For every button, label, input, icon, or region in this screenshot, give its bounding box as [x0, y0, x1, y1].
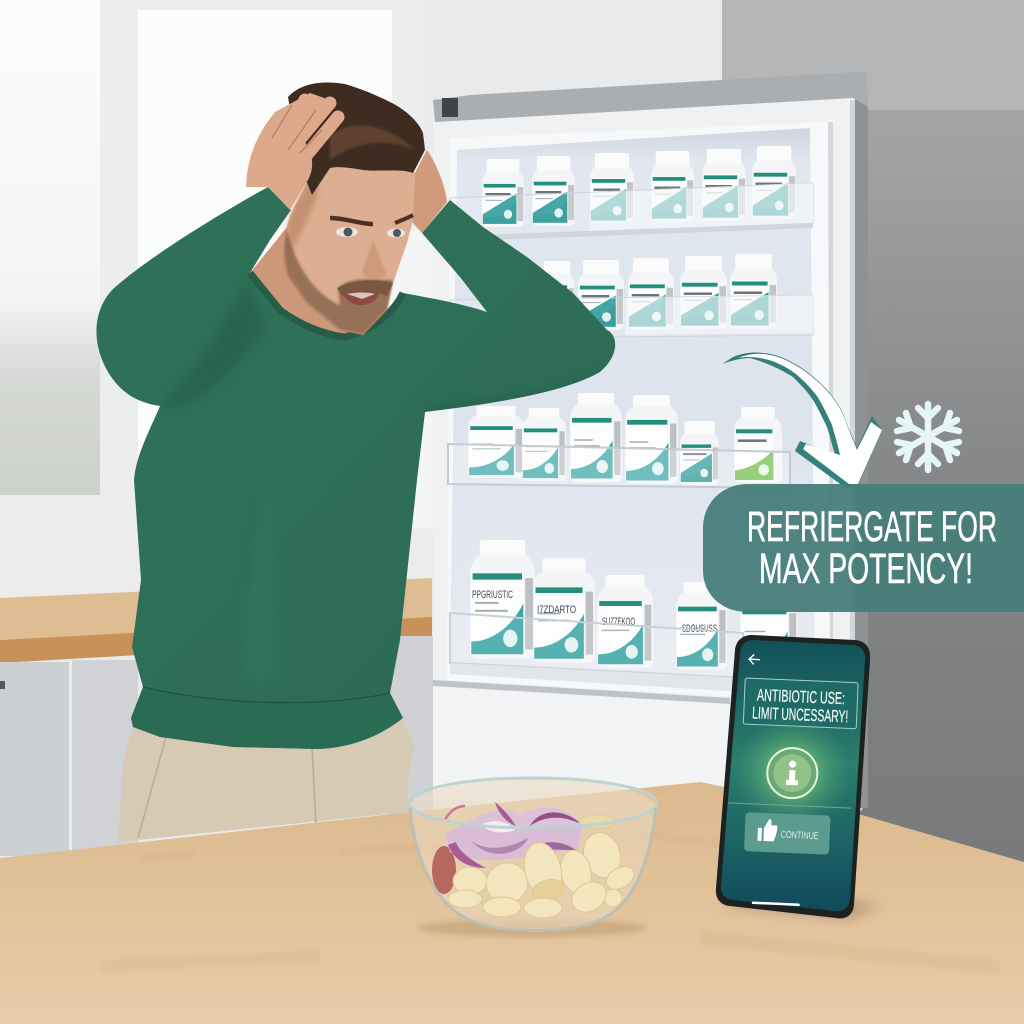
fridge top cap [433, 72, 868, 122]
countertop [0, 782, 1024, 1024]
shelf 3 bottles [468, 393, 782, 485]
shelf 3 rail [448, 444, 790, 488]
shelf 2 rail [450, 295, 813, 337]
bottle label names: PPGRIUSTIC [472, 589, 513, 601]
hem seam [143, 687, 390, 703]
back arrow [749, 654, 760, 665]
banana slices [448, 815, 638, 918]
confirm button [744, 812, 831, 855]
stubble [285, 230, 393, 335]
fridge frame stripes [828, 100, 855, 700]
bottle label names: SUZZEKOO [602, 616, 635, 628]
bowl rim [409, 778, 657, 828]
neck [250, 227, 370, 342]
nose [362, 240, 386, 279]
snowflake icon [897, 404, 959, 470]
callout banner [703, 484, 1024, 612]
confirm button: CONTINUE [780, 830, 819, 842]
shelf 1 bottles [482, 146, 796, 227]
alert box: LIMIT UNCESSARY! [752, 703, 849, 726]
phone shadow [720, 890, 880, 920]
phone body [716, 635, 870, 918]
worried man [96, 83, 615, 842]
hair highlight [330, 126, 415, 160]
window [0, 0, 434, 532]
bottle label names [472, 589, 717, 635]
face side shading [287, 168, 318, 260]
trouser seams [138, 737, 316, 838]
wooden countertop back [0, 578, 432, 663]
shelf 1 rail [450, 183, 813, 240]
red piece [432, 846, 456, 894]
fridge interior [450, 128, 815, 695]
smartphone [716, 635, 880, 920]
raised hand left [246, 93, 338, 210]
curved arrow [722, 352, 882, 489]
glass bowl with bananas and onion [409, 778, 657, 937]
fridge inner frame [447, 122, 830, 702]
ribbed collar [250, 273, 403, 337]
trousers [118, 720, 414, 842]
onion pieces [445, 802, 582, 868]
shelf 2 bottles [540, 254, 777, 330]
fridge side edge [855, 98, 868, 808]
right wall [722, 0, 1024, 880]
hair [288, 83, 425, 195]
bowl shadow [417, 919, 647, 937]
screen content [724, 654, 859, 908]
shelf 4 bottles [470, 540, 798, 673]
sweater shading [131, 280, 610, 749]
window sill [0, 528, 432, 598]
alert box [743, 678, 858, 729]
wood planks [100, 830, 1000, 975]
refrigerator [433, 72, 868, 815]
moustache and mouth [337, 280, 393, 305]
bottle label names: I7ZDARTO [537, 604, 576, 616]
eyes and brows [330, 215, 413, 238]
right hand [412, 150, 447, 233]
lower door panel [433, 682, 730, 790]
bowl glass [410, 778, 656, 930]
face [285, 157, 415, 335]
divider [728, 802, 851, 809]
lower cabinets [0, 636, 433, 856]
fridge body [433, 97, 868, 815]
sweater [96, 187, 615, 749]
top cap dark notch [442, 98, 458, 117]
shelf 4 rail [450, 613, 743, 692]
bottle label names: SDOUSUSS [682, 623, 717, 635]
alert box: ANTIBIOTIC USE: [757, 686, 845, 708]
phone screen [721, 640, 865, 911]
home bar [752, 902, 800, 906]
info icon [732, 713, 853, 833]
